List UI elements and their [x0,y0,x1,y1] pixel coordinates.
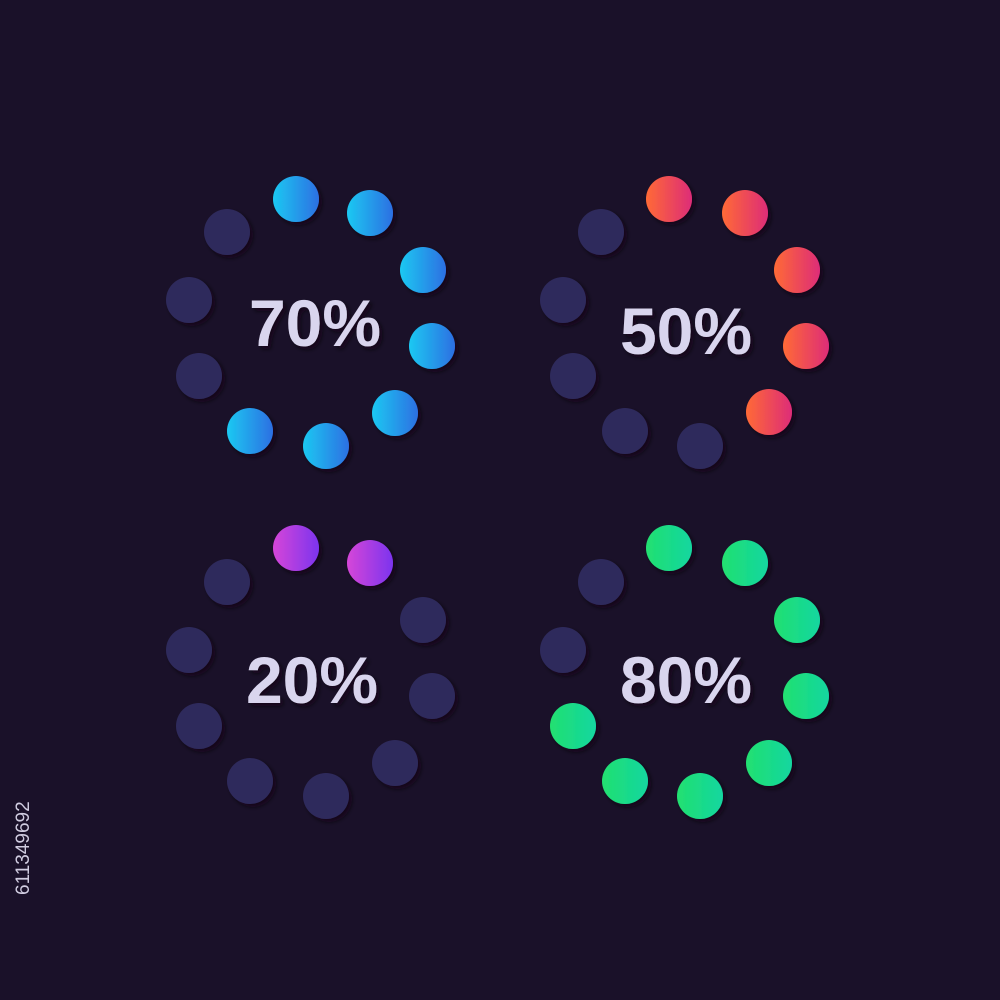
chart: 20%: 20% [246,643,378,717]
chart: 80%: 80% [620,643,752,717]
side id text: 611349692 [13,801,34,895]
chart: 70% [166,176,455,469]
chart: 80% [540,525,829,819]
chart: 50%: 50% [620,294,752,368]
chart: 70%: 70% [249,286,381,360]
chart: 20% [166,525,455,819]
chart: 50% [540,176,829,469]
